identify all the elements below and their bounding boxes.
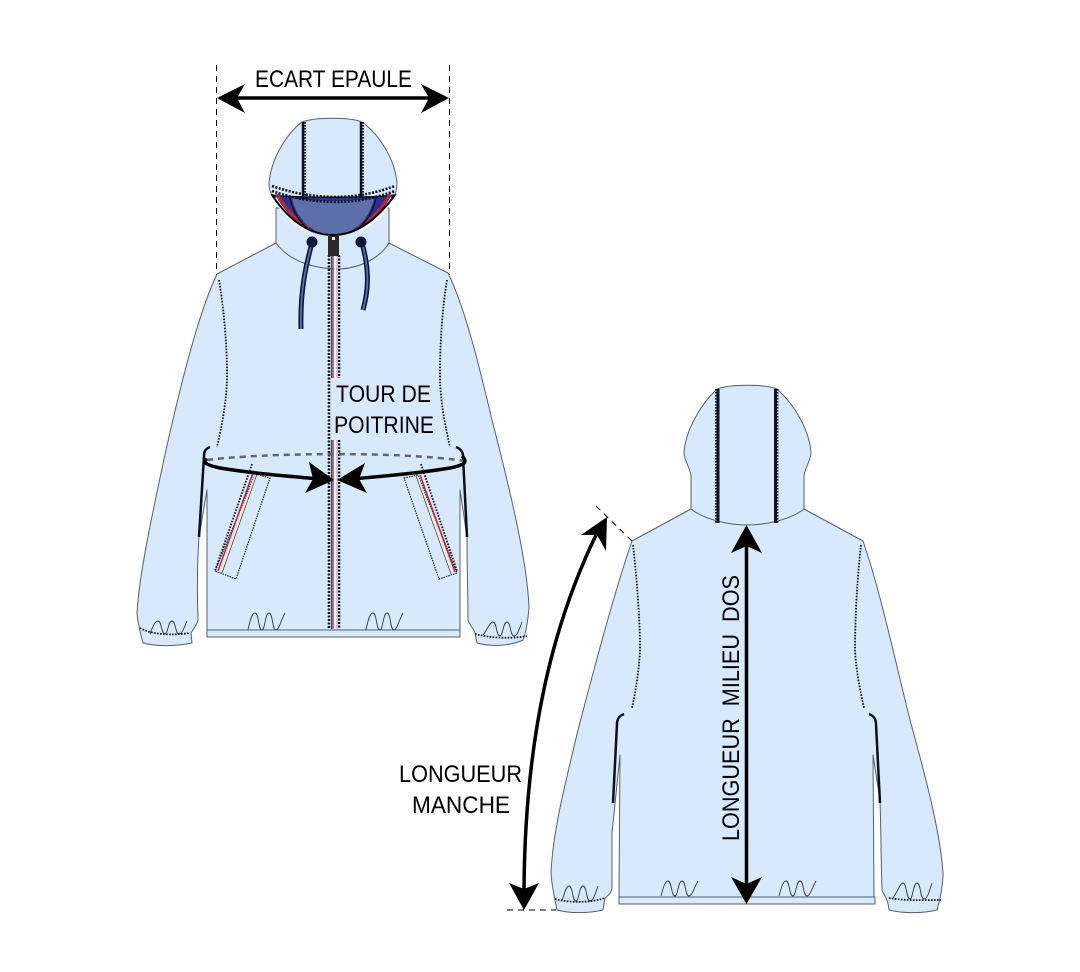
back armhole stitching — [632, 545, 864, 708]
back slits — [613, 714, 880, 803]
front body and sleeves — [137, 208, 529, 646]
label: tour de poitrine: TOUR DE — [336, 381, 431, 408]
hood lining — [272, 194, 395, 235]
back length arrow — [731, 525, 762, 904]
sleeve length measurement — [399, 506, 632, 910]
right pocket — [404, 464, 457, 579]
shoulder width measurement — [216, 65, 450, 275]
chest measurement — [205, 381, 465, 493]
hem and cuff gathers — [140, 613, 528, 638]
side slits — [199, 447, 467, 537]
chest arrow right — [337, 456, 465, 493]
shoulder guide lines — [216, 65, 450, 275]
back length measurement — [718, 525, 762, 904]
label: tour de poitrine: POITRINE — [334, 412, 434, 439]
label: longueur manche: LONGUEUR — [399, 761, 522, 788]
back hood — [684, 385, 811, 525]
hood seams — [272, 122, 395, 202]
chest back dashed line — [207, 454, 465, 461]
hood — [269, 118, 397, 235]
back hood seams — [716, 389, 778, 523]
sleeve arrow — [509, 517, 607, 910]
sleeve guide lines — [507, 506, 632, 910]
label: longueur manche: MANCHE — [412, 792, 510, 819]
back gathers — [555, 881, 941, 902]
front zipper — [328, 236, 339, 629]
chest arrow left — [205, 458, 334, 493]
left pocket — [215, 464, 270, 579]
front jacket — [137, 118, 529, 646]
label: longueur manche — [399, 761, 522, 819]
drawcords — [301, 236, 367, 329]
front collar line — [276, 243, 389, 269]
label: ecart epaule: ECART EPAULE — [255, 66, 412, 93]
back jacket — [551, 385, 943, 913]
back body and sleeves — [551, 509, 943, 913]
label: tour de poitrine — [334, 381, 434, 439]
shoulder arrow — [217, 84, 449, 113]
armhole stitching — [217, 280, 450, 447]
label: longueur milieu dos: LONGUEUR MILIEU DOS — [718, 575, 745, 841]
